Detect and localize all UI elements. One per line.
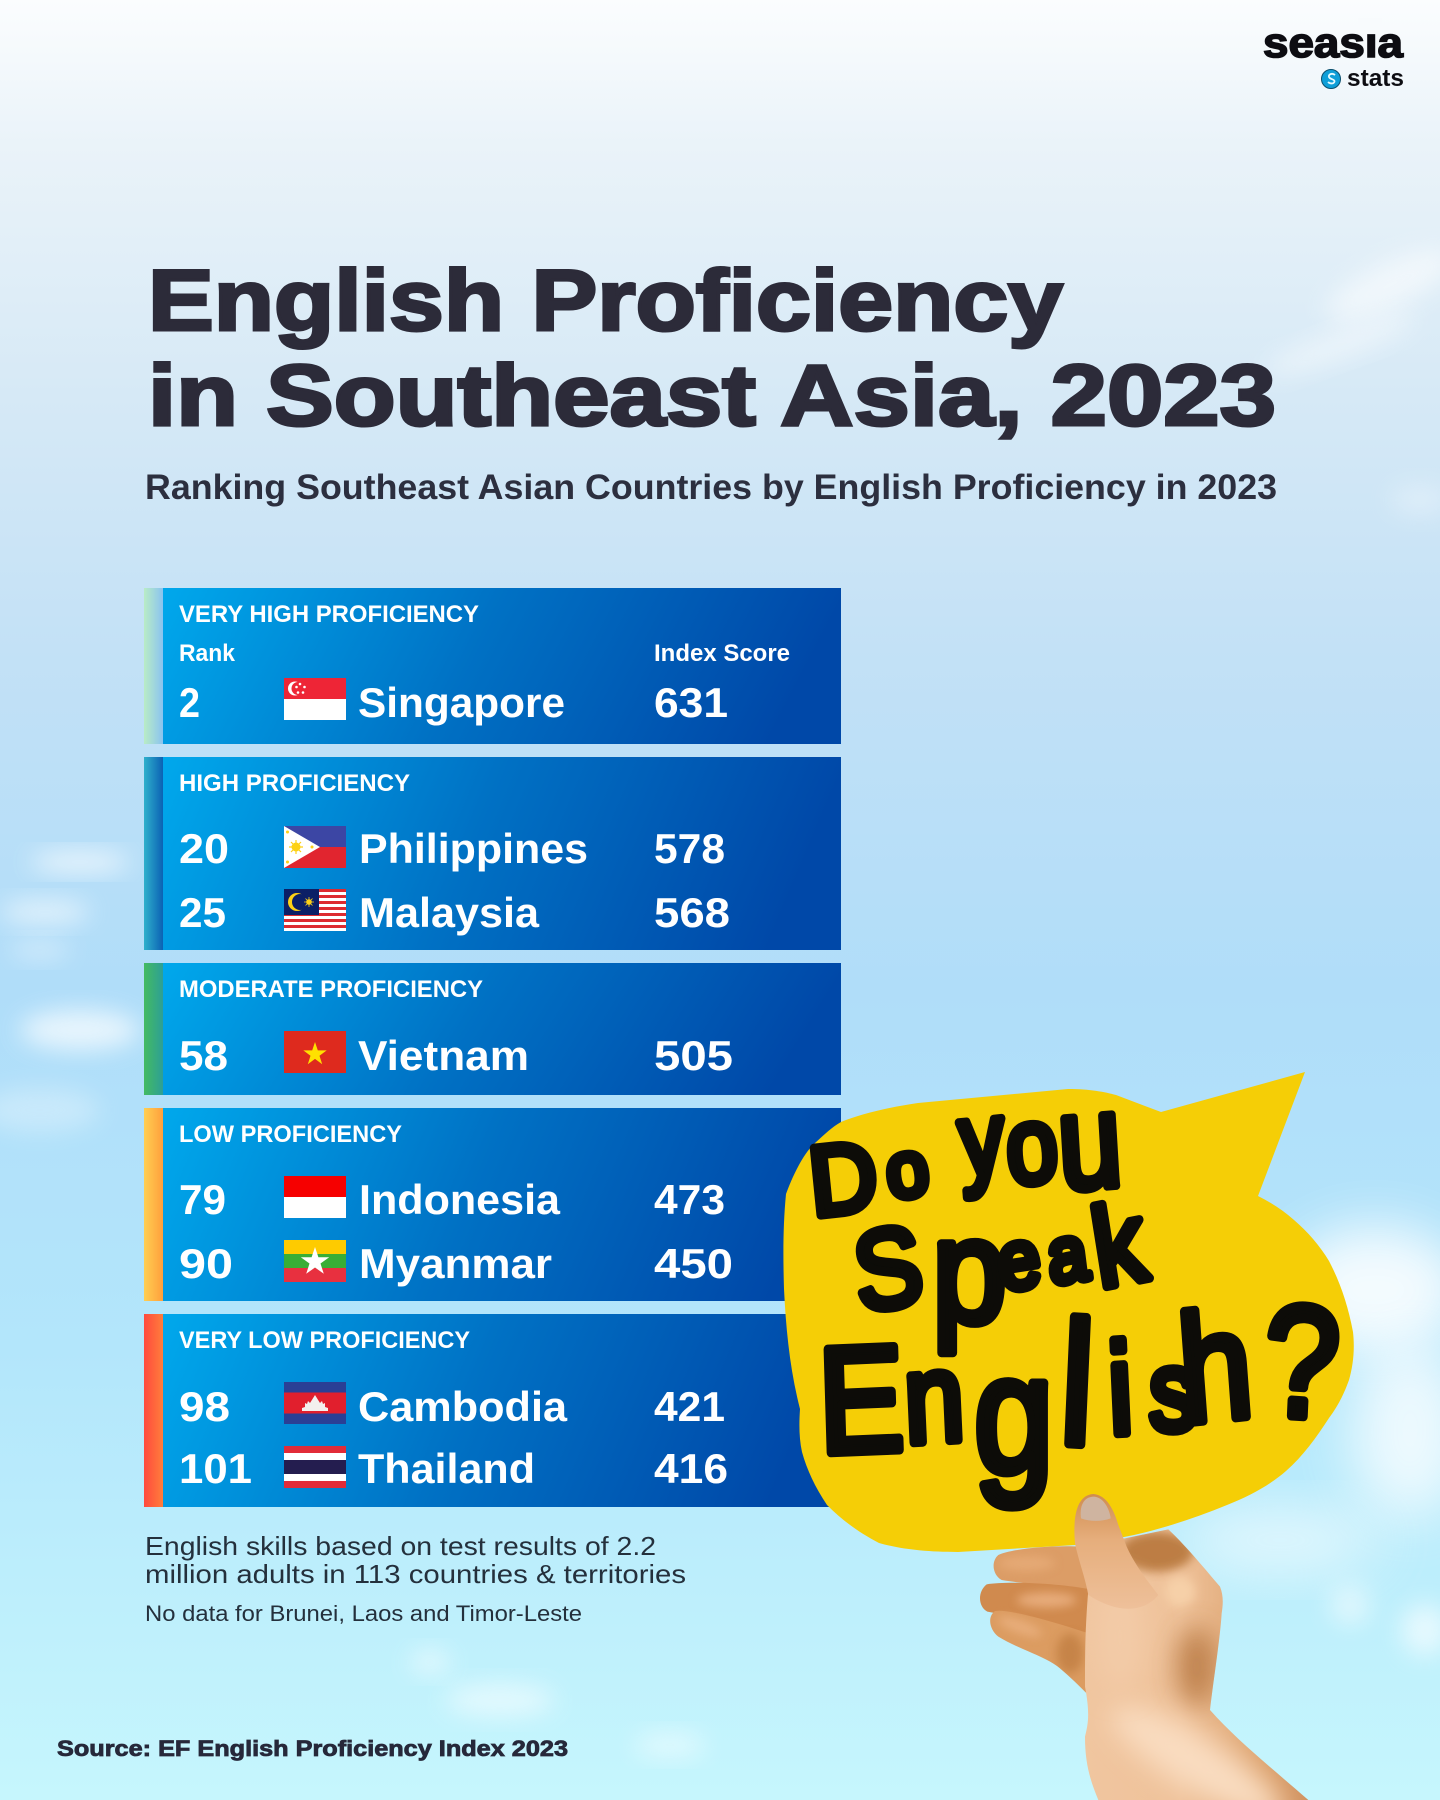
panel: high proficiency (144, 757, 841, 950)
sign lettering: Speak: a (1042, 1208, 1093, 1301)
finger three (990, 1611, 1087, 1693)
flag: Myanmar (284, 1240, 346, 1282)
title: English Proficiency (148, 253, 1063, 349)
sign lettering: English: l (1057, 1286, 1098, 1483)
note: sample description: English skills based on test results of 2.2 (145, 1531, 656, 1561)
source: Source: EF English Proficiency Index 2023 (57, 1736, 568, 1761)
finger two (980, 1583, 1090, 1636)
sign lettering: Speak: S (847, 1202, 929, 1336)
flag: Singapore (284, 678, 346, 720)
sign lettering: you: y (955, 1080, 1008, 1200)
heading: very high proficiency: VERY HIGH PROFICIENCY (179, 601, 479, 628)
score: Vietnam: 505 (654, 1032, 733, 1079)
title (148, 253, 1276, 444)
logo: seasia stats (1263, 18, 1404, 92)
score: Indonesia: 473 (654, 1176, 725, 1223)
note: sample description: million adults in 113 countries & territories (145, 1559, 686, 1589)
panel: very low proficiency (144, 1314, 841, 1507)
note: no data: No data for Brunei, Laos and Timor-Leste (145, 1601, 582, 1626)
sign lettering: English: i (1105, 1317, 1136, 1462)
logo subtitle: stats (1347, 65, 1404, 92)
rank: Thailand: 101 (179, 1445, 252, 1492)
country: Cambodia: Cambodia (358, 1383, 568, 1430)
bubble shape (783, 1072, 1354, 1552)
score: Philippines: 578 (654, 825, 725, 872)
thumb (1074, 1494, 1158, 1609)
hand holding sign (980, 1529, 1308, 1800)
heading: high proficiency: HIGH PROFICIENCY (179, 770, 410, 797)
sign lettering: Do: D (804, 1121, 882, 1237)
sign lettering: English: s (1149, 1329, 1197, 1455)
rank: Vietnam: 58 (179, 1032, 228, 1079)
speech bubble sign (783, 1064, 1354, 1552)
rank: Malaysia: 25 (179, 889, 226, 936)
sign lettering: English: n (901, 1325, 967, 1470)
logo icon (1322, 70, 1340, 88)
rank: Philippines: 20 (179, 825, 229, 872)
sign lettering: English: h (1173, 1278, 1258, 1456)
rank: Cambodia: 98 (179, 1383, 230, 1430)
rank: Singapore: 2 (179, 679, 200, 726)
title: in Southeast Asia, 2023 (148, 348, 1276, 444)
country: Thailand: Thailand (358, 1445, 535, 1492)
column label: rank: Rank (179, 640, 236, 667)
sign lettering: you: u (1054, 1064, 1126, 1219)
flag: Thailand (284, 1446, 346, 1488)
rank: Indonesia: 79 (179, 1176, 226, 1223)
country: Vietnam: Vietnam (358, 1032, 529, 1079)
sign lettering: Speak: k (1084, 1178, 1154, 1312)
panel: very high proficiency (144, 588, 841, 744)
sign lettering: English: g (974, 1321, 1054, 1509)
finger shading (996, 1556, 1083, 1673)
sign lettering: Speak: p (932, 1189, 1006, 1354)
finger one (994, 1546, 1090, 1591)
panel: moderate proficiency (144, 963, 841, 1095)
country: Malaysia: Malaysia (359, 889, 540, 936)
sign lettering: you: o (1002, 1083, 1062, 1209)
sign lettering: question mark: ? (1261, 1272, 1343, 1453)
flag: Malaysia (284, 889, 346, 931)
column label: index score: Index Score (654, 640, 790, 667)
country: Myanmar: Myanmar (359, 1240, 552, 1287)
score: Singapore: 631 (654, 679, 728, 726)
heading: moderate proficiency: MODERATE PROFICIENCY (179, 976, 483, 1003)
heading: low proficiency: LOW PROFICIENCY (179, 1121, 402, 1148)
heading: very low proficiency: VERY LOW PROFICIENCY (179, 1327, 470, 1354)
panel: low proficiency (144, 1108, 841, 1301)
logo: seasia stats: seasia (1263, 19, 1404, 66)
flag: Philippines (284, 826, 346, 868)
rank: Myanmar: 90 (179, 1240, 233, 1287)
thumbnail (1081, 1497, 1111, 1521)
country: Philippines: Philippines (359, 825, 588, 872)
score: Malaysia: 568 (654, 889, 730, 936)
flag: Cambodia (284, 1382, 346, 1424)
score: Cambodia: 421 (654, 1383, 725, 1430)
score: Thailand: 416 (654, 1445, 728, 1492)
note: sample description (145, 1531, 686, 1589)
hand shading (1097, 1532, 1296, 1800)
back of hand and arm (1077, 1529, 1308, 1800)
country: Indonesia: Indonesia (359, 1176, 561, 1223)
subtitle: Ranking Southeast Asian Countries by English Proficiency in 2023 (145, 468, 1277, 507)
score: Myanmar: 450 (654, 1240, 733, 1287)
sign lettering: English: E (816, 1315, 906, 1485)
sign lettering: Speak: e (992, 1211, 1045, 1309)
flag: Indonesia (284, 1176, 346, 1218)
country: Singapore: Singapore (358, 679, 565, 726)
flag: Vietnam (284, 1031, 346, 1073)
sign lettering: Do: o (881, 1124, 933, 1216)
